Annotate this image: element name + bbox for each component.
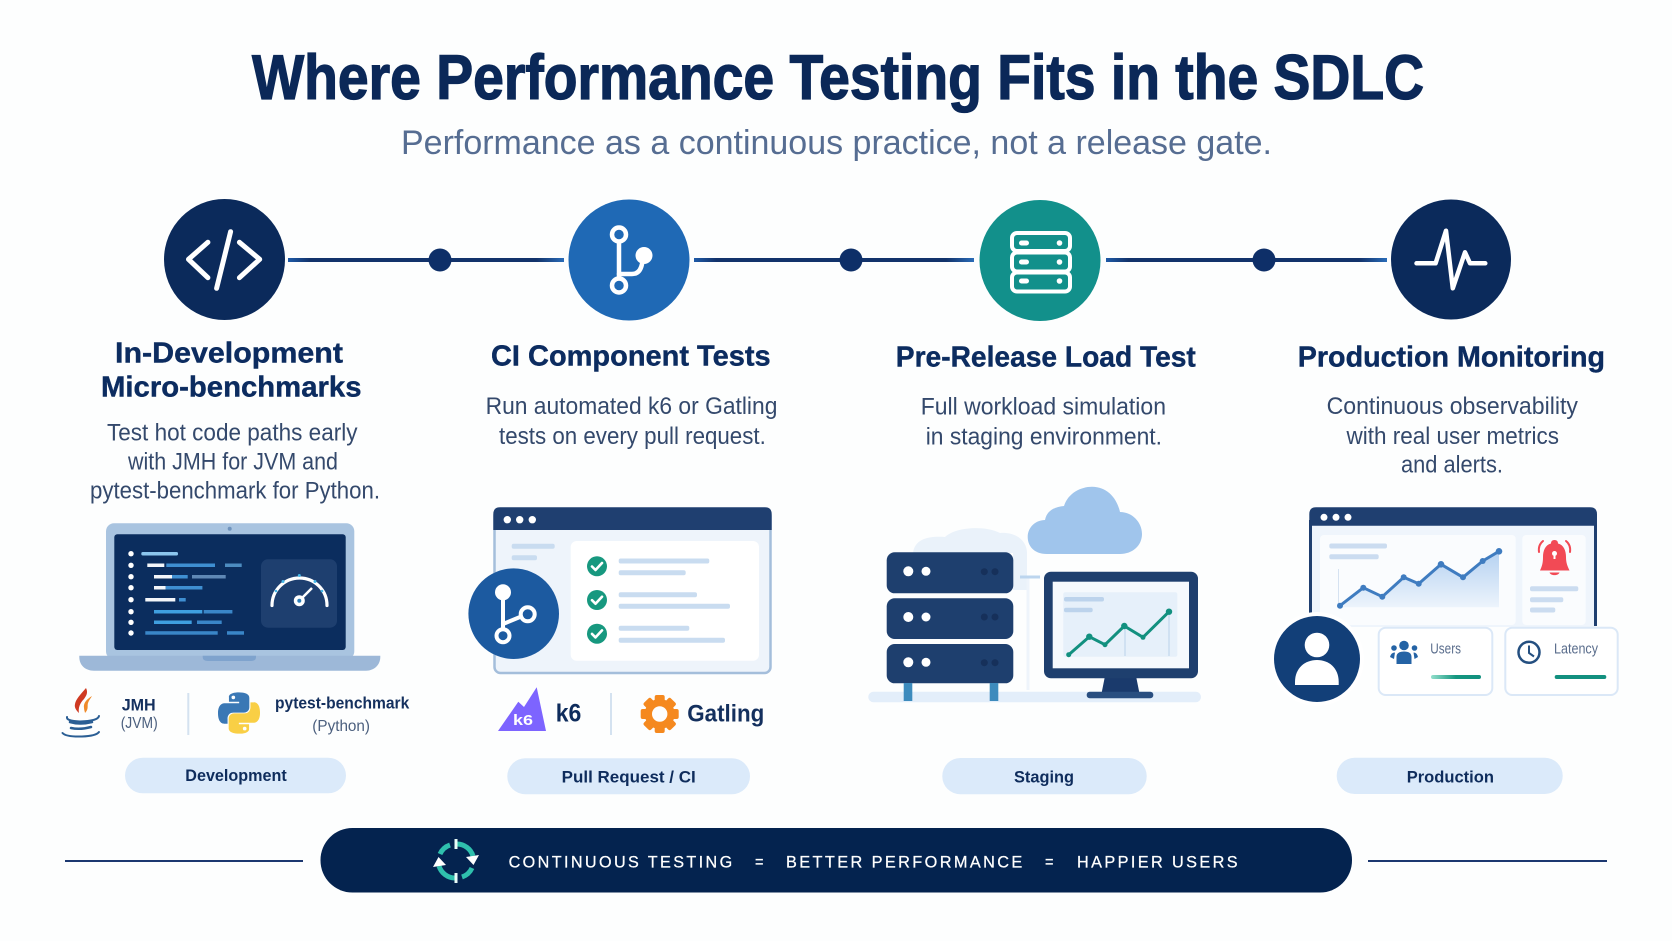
icon: python xyxy=(218,692,260,734)
badge: pull request: Pull Request / CI xyxy=(562,769,696,787)
description xyxy=(486,393,777,450)
title: Where Performance Testing Fits in the SDLC xyxy=(252,43,1424,113)
banner: continuous testing: CONTINUOUS TESTING xyxy=(509,853,735,872)
banner: continuous testing: HAPPIER USERS xyxy=(1077,853,1240,872)
logo: gatling: Gatling xyxy=(687,701,764,728)
description: with JMH for JVM and xyxy=(127,448,338,475)
label: pytest-benchmark xyxy=(275,694,410,735)
icon: java xyxy=(62,688,99,737)
icon: server xyxy=(980,200,1100,321)
logo: k6: k6 xyxy=(556,700,581,728)
banner: continuous testing: = xyxy=(755,853,764,872)
timeline connectors xyxy=(288,248,1387,272)
description xyxy=(90,420,380,504)
badge: production xyxy=(1337,758,1563,794)
description: with real user metrics xyxy=(1346,423,1559,450)
icon: pulse xyxy=(1391,200,1511,320)
icon: refresh cycle xyxy=(433,839,479,883)
description: Full workload simulation xyxy=(921,393,1166,420)
illustration: laptop with code and gauge xyxy=(79,523,380,671)
heading: Pre-Release Load Test xyxy=(896,342,1196,374)
label: JMH: JMH xyxy=(122,696,156,715)
heading xyxy=(101,338,362,404)
heading: CI Component Tests xyxy=(491,341,771,373)
illustration: CI window with checks xyxy=(468,507,772,673)
panel: CI component tests xyxy=(468,341,777,794)
card: latency: Latency xyxy=(1554,641,1599,657)
label: JMH xyxy=(121,696,158,732)
logo: gatling xyxy=(641,695,764,733)
banner: continuous testing xyxy=(320,828,1352,892)
illustration: servers, cloud and monitor xyxy=(868,487,1201,702)
label: pytest-benchmark: (Python) xyxy=(312,718,370,735)
icon: user avatar xyxy=(1270,612,1364,706)
label: pytest-benchmark: pytest-benchmark xyxy=(275,694,410,712)
panel: production monitoring xyxy=(1270,342,1618,794)
card: latency xyxy=(1505,628,1618,695)
badge: development: Development xyxy=(185,767,287,785)
description: Continuous observability xyxy=(1327,393,1579,420)
icon: alert bell xyxy=(1539,540,1570,575)
card: users xyxy=(1379,628,1492,695)
badge: pull request xyxy=(507,758,750,794)
description: Run automated k6 or Gatling xyxy=(486,393,777,420)
subtitle: Performance as a continuous practice, not a release gate. xyxy=(401,124,1272,162)
badge: staging: Staging xyxy=(1014,769,1074,787)
heading: Micro-benchmarks xyxy=(101,372,362,404)
description: tests on every pull request. xyxy=(499,423,766,450)
heading: In-Development xyxy=(115,338,343,370)
heading: Production Monitoring xyxy=(1298,342,1605,374)
badge: production: Production xyxy=(1407,768,1494,786)
label: JMH: (JVM) xyxy=(121,715,158,732)
icon: git branch xyxy=(568,200,690,320)
banner: continuous testing: = xyxy=(1045,853,1054,872)
banner: continuous testing: BETTER PERFORMANCE xyxy=(786,853,1025,872)
logo: k6: k6 xyxy=(513,712,533,729)
badge: development xyxy=(125,758,346,793)
description: pytest-benchmark for Python. xyxy=(90,477,380,504)
description xyxy=(1327,393,1579,479)
description xyxy=(921,393,1166,450)
description: and alerts. xyxy=(1401,452,1503,479)
card: users: Users xyxy=(1430,641,1461,657)
panel: pre-release load test xyxy=(868,342,1201,794)
panel: in-development xyxy=(62,338,410,793)
logo: k6 xyxy=(498,687,581,731)
icon: code xyxy=(164,199,285,320)
illustration: monitoring dashboard xyxy=(1270,507,1618,706)
description: Test hot code paths early xyxy=(107,420,358,447)
description: in staging environment. xyxy=(926,423,1162,450)
badge: staging xyxy=(942,758,1147,794)
